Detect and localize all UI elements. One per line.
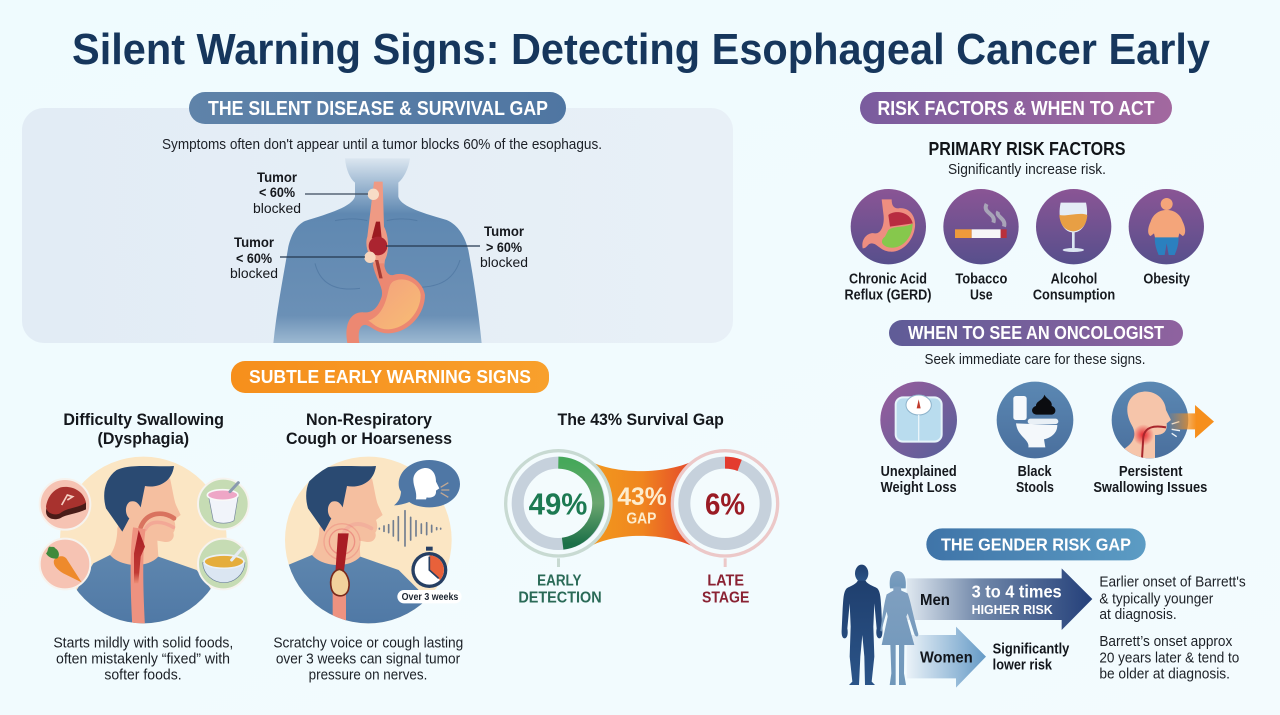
section: difficulty swallowing	[40, 410, 249, 683]
description: over 3 weeks can signal tumor	[276, 651, 460, 667]
labels: oncologist signs: Persistent	[1119, 464, 1183, 480]
callout: tumor lower	[230, 234, 365, 281]
heading: subtle early warning signs: SUBTLE EARLY WARNING SIGNS	[249, 367, 531, 387]
heading: (Dysphagia)	[97, 429, 189, 448]
label: early detection: EARLY	[537, 573, 581, 590]
labels: oncologist signs: Stools	[1016, 480, 1054, 496]
label: over 3 weeks: Over 3 weeks	[402, 592, 459, 603]
icon: cigarette	[943, 189, 1019, 264]
label: higher risk: 3 to 4 times	[972, 581, 1062, 601]
figure: woman	[880, 571, 918, 685]
icon: stopwatch	[411, 547, 447, 588]
labels: oncologist signs: Unexplained	[881, 464, 957, 480]
label: lower risk: lower risk	[993, 657, 1053, 673]
labels: oncologist signs: Black	[1018, 464, 1052, 480]
heading: The 43% Survival Gap	[557, 410, 724, 429]
text: women detail: Barrett’s onset approx	[1099, 634, 1233, 650]
label: higher risk	[972, 581, 1062, 617]
labels: risk factors	[844, 271, 1191, 303]
icon: obesity	[1129, 189, 1204, 264]
label: 43% gap: 43%	[617, 484, 667, 511]
labels: risk factors: Obesity	[1143, 271, 1191, 287]
panel: risk factor icons	[844, 189, 1204, 303]
label: men: Men	[920, 592, 950, 609]
heading: silent disease: THE SILENT DISEASE & SURVIVAL GAP	[208, 98, 548, 120]
callout: tumor large	[386, 223, 528, 270]
label: lower risk	[993, 641, 1070, 673]
illustration: head with tumor	[285, 456, 452, 624]
description	[273, 636, 463, 683]
label: early detection	[518, 558, 602, 607]
label: late stage: STAGE	[702, 590, 749, 607]
description: pressure on nerves.	[309, 667, 427, 683]
subtitle: seek immediate care: Seek immediate care for these signs.	[924, 352, 1146, 368]
icon: speech bubble	[394, 460, 460, 507]
subtitle: primary risk factors: Significantly increase risk.	[948, 162, 1106, 178]
figure: man	[842, 565, 882, 685]
heading: risk factors and when to act: RISK FACTORS & WHEN TO ACT	[878, 98, 1154, 120]
panel: the silent disease	[22, 92, 733, 343]
callout: tumor large: blocked	[480, 254, 528, 270]
description: often mistakenly “fixed” with	[56, 651, 230, 667]
label: women: Women	[920, 650, 973, 667]
gauge: early detection	[506, 451, 611, 556]
heading: subtle early warning signs	[231, 361, 549, 393]
text: men detail: Earlier onset of Barrett's	[1099, 575, 1246, 591]
icon: throat	[1112, 382, 1188, 458]
callout: tumor upper: < 60%	[259, 184, 295, 200]
icon: sound wave	[379, 511, 441, 546]
section: cough or hoarseness	[265, 410, 463, 683]
tumor upper	[368, 189, 379, 200]
callout: tumor lower: Tumor	[234, 234, 275, 250]
callout: tumor upper: blocked	[253, 200, 301, 216]
labels: risk factors: Chronic Acid	[849, 271, 927, 287]
label: 43% gap: GAP	[626, 510, 657, 527]
label: lower risk: Significantly	[993, 641, 1070, 657]
icon: yogurt	[198, 479, 249, 529]
heading: Difficulty Swallowing	[63, 410, 224, 429]
label: higher risk: HIGHER RISK	[972, 602, 1053, 617]
connector: gap	[587, 459, 697, 548]
text: men detail: & typically younger	[1099, 591, 1214, 607]
text: men detail: at diagnosis.	[1099, 607, 1177, 623]
description: Starts mildly with solid foods,	[53, 636, 233, 652]
label: early detection: DETECTION	[518, 590, 602, 607]
illustration: head with esophagus	[60, 457, 227, 627]
labels: risk factors: Consumption	[1033, 287, 1115, 303]
torso illustration with esophagus and stomach	[273, 158, 482, 343]
description	[53, 636, 233, 683]
heading: primary risk factors: PRIMARY RISK FACTORS	[928, 139, 1126, 159]
label: late stage	[702, 558, 749, 607]
description: Scratchy voice or cough lasting	[273, 636, 463, 652]
label: late stage: LATE	[707, 573, 744, 590]
gauge: late stage: 6%	[705, 487, 745, 521]
panel: gender risk gap	[842, 528, 1246, 688]
arrow: orange	[1170, 405, 1214, 438]
icon: soup	[198, 539, 249, 589]
callout: tumor upper: Tumor	[257, 169, 298, 185]
icon: acid reflux	[851, 189, 926, 264]
description: softer foods.	[104, 667, 182, 683]
section: survival gap chart	[506, 410, 778, 607]
heading: Non-Respiratory	[306, 410, 433, 429]
heading	[63, 410, 224, 448]
text: women detail: be older at diagnosis.	[1099, 666, 1230, 682]
tumor large	[369, 237, 387, 255]
heading: when to see an oncologist: WHEN TO SEE AN ONCOLOGIST	[908, 323, 1164, 343]
label: 43% gap	[617, 484, 667, 527]
title: Silent Warning Signs: Detecting Esophageal Cancer Early	[72, 25, 1210, 74]
callout: tumor lower: blocked	[230, 265, 278, 281]
icon: toilet	[997, 382, 1073, 458]
icon: weight scale	[880, 382, 957, 458]
labels: risk factors: Alcohol	[1051, 271, 1097, 287]
tumor lower left	[364, 252, 376, 263]
heading: THE GENDER RISK GAP	[941, 534, 1131, 554]
labels: oncologist signs: Swallowing Issues	[1093, 480, 1207, 496]
heading: silent disease	[189, 92, 566, 124]
panel: oncologist icons	[880, 382, 1214, 496]
labels: risk factors: Tobacco	[955, 271, 1007, 287]
labels: risk factors: Use	[970, 287, 993, 303]
callout: tumor upper	[253, 169, 368, 216]
callout: tumor large: Tumor	[484, 223, 525, 239]
text: men detail	[1099, 575, 1246, 623]
labels: oncologist signs: Weight Loss	[881, 480, 957, 496]
icon: alcohol	[1036, 189, 1111, 264]
text: women detail	[1099, 634, 1239, 682]
heading: risk factors and when to act	[860, 92, 1172, 124]
arrow: men	[907, 568, 1092, 630]
labels: risk factors: Reflux (GERD)	[844, 287, 932, 303]
text: women detail: 20 years later & tend to	[1099, 650, 1239, 666]
gauge: late stage	[672, 451, 778, 556]
panel subtitle: Symptoms often don't appear until a tumor blocks 60% of the esophagus.	[162, 136, 602, 153]
callout: tumor lower: < 60%	[236, 250, 272, 266]
icon: carrot	[40, 539, 90, 589]
heading: Cough or Hoarseness	[286, 429, 452, 448]
labels: oncologist signs	[881, 464, 1207, 496]
heading	[926, 528, 1146, 560]
callout: tumor large: > 60%	[486, 239, 522, 255]
arrow: women	[907, 627, 986, 688]
heading	[286, 410, 452, 448]
gauge: early detection: 49%	[529, 487, 587, 521]
icon: steak	[40, 479, 90, 530]
